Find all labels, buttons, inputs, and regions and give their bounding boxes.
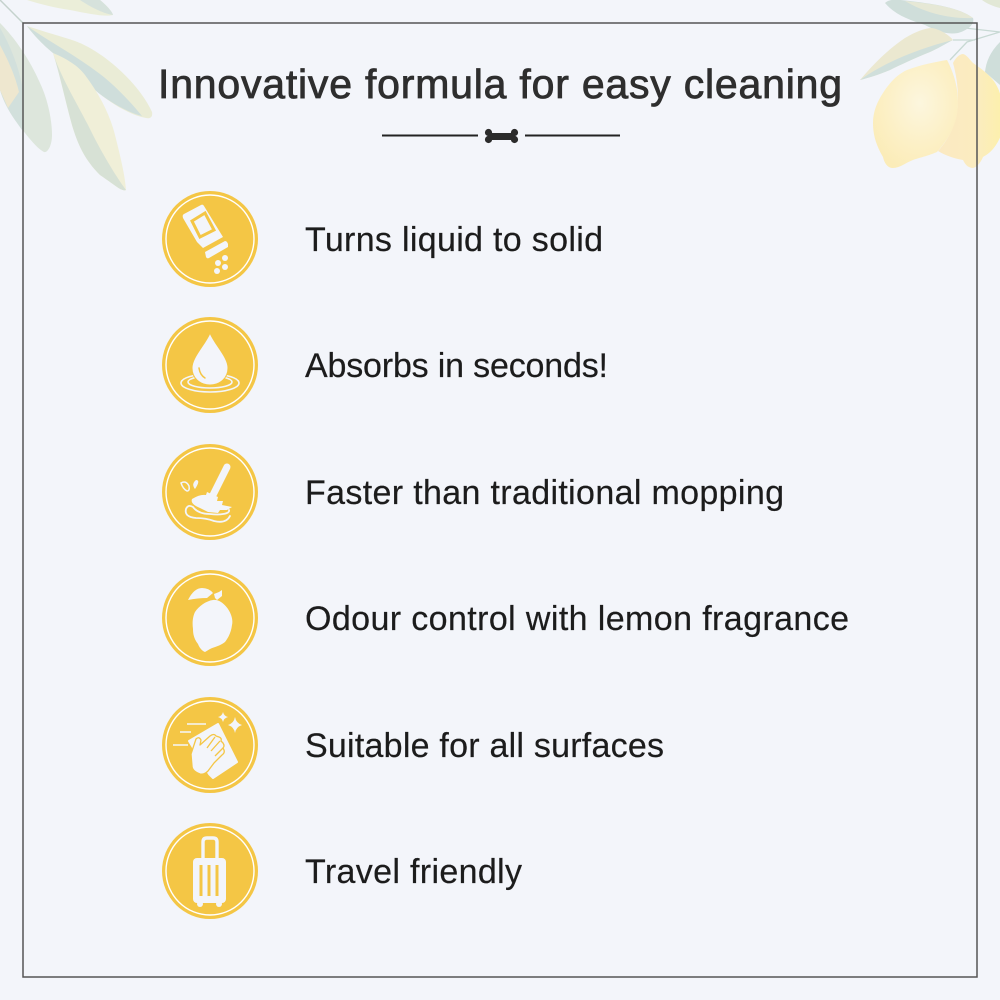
- icon: water drop with ripples: [162, 317, 258, 413]
- divider with bone icon: [382, 129, 620, 143]
- icon: hand wiping: [162, 697, 258, 793]
- icon: mop and spill: [162, 444, 258, 540]
- label: Suitable for all surfaces: [305, 727, 664, 765]
- label: Turns liquid to solid: [305, 221, 603, 259]
- feature row: travel friendly: [162, 823, 522, 919]
- label: Travel friendly: [305, 853, 522, 891]
- title: Innovative formula for easy cleaning: [158, 61, 842, 107]
- label: Absorbs in seconds!: [305, 347, 608, 385]
- label: Faster than traditional mopping: [305, 474, 784, 512]
- icon: shaker bottle: [162, 191, 258, 287]
- feature row: faster than mopping: [162, 444, 784, 540]
- icon: suitcase: [162, 823, 258, 919]
- icon: lemon: [162, 570, 258, 666]
- decoration: olive leaves top left: [0, 0, 152, 190]
- decoration: lemons and leaves top right: [860, 0, 1000, 168]
- feature row: suitable for all surfaces: [162, 697, 664, 793]
- feature row: turns liquid to solid: [162, 191, 603, 287]
- feature row: odour control: [162, 570, 849, 666]
- feature row: absorbs in seconds: [162, 317, 608, 413]
- label: Odour control with lemon fragrance: [305, 600, 849, 638]
